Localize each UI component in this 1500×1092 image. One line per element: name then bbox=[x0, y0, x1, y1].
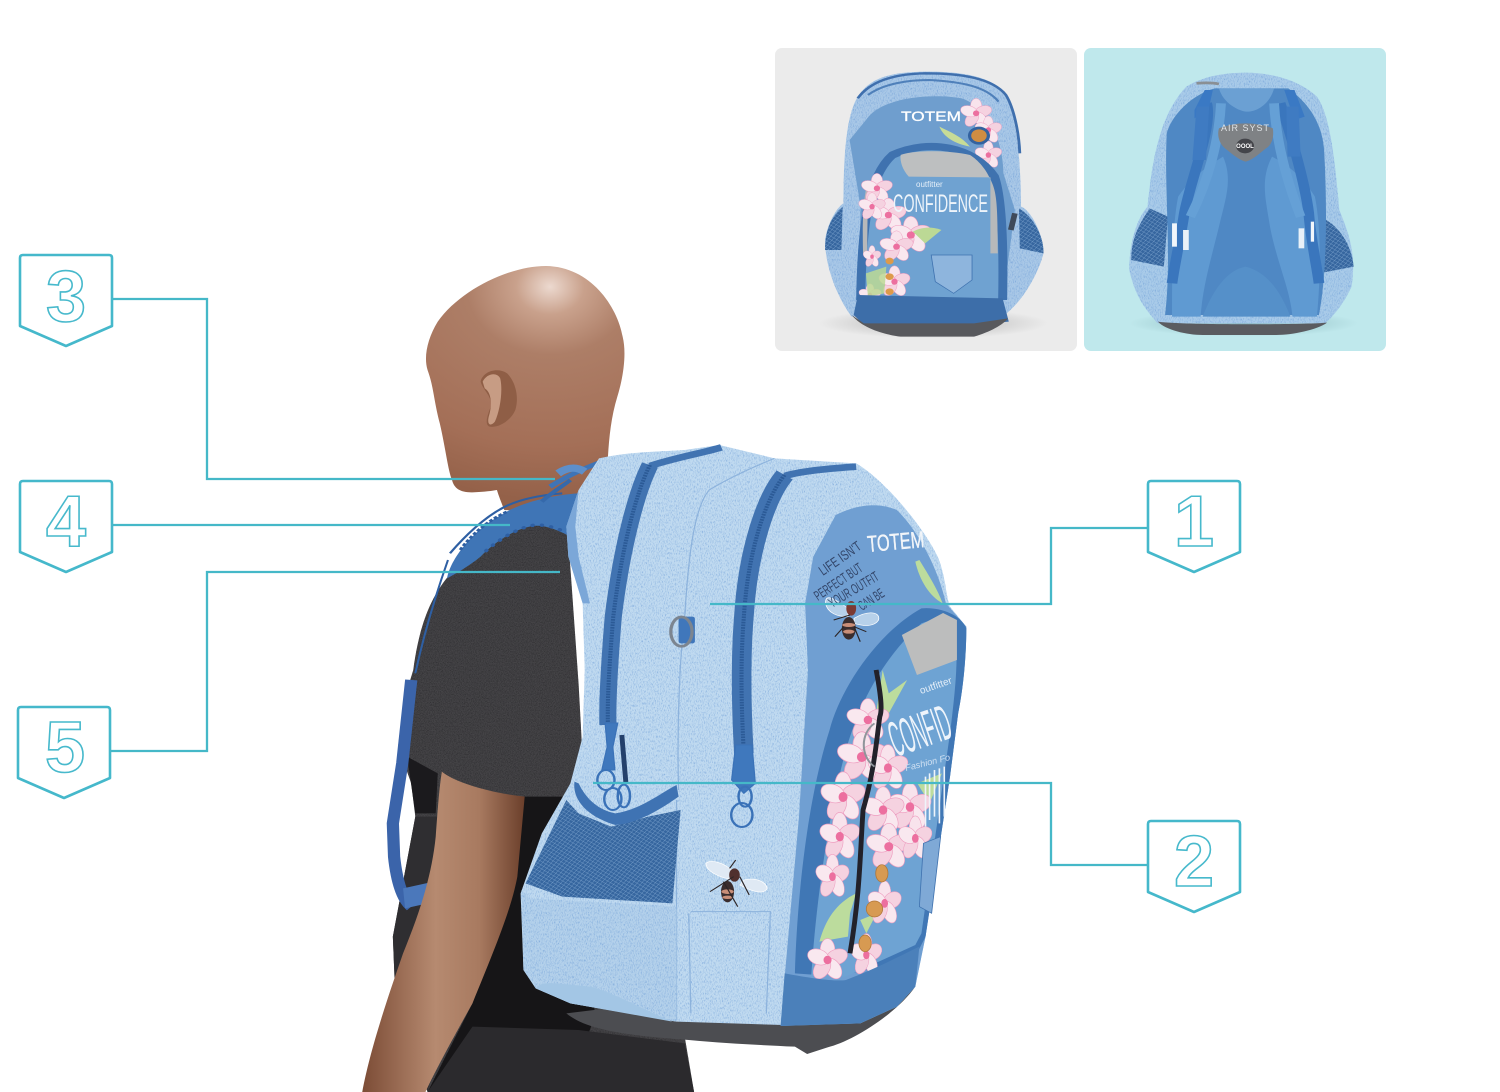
pocket zipper opening bbox=[850, 670, 881, 953]
text: confidence print: CONFIDENCE bbox=[893, 190, 988, 218]
text: slogan print: LIFE ISN'T bbox=[816, 538, 864, 578]
text: front view logo: TOTEM bbox=[901, 108, 961, 124]
bee front bbox=[826, 598, 879, 642]
text: slogan print: YOUR OUTFIT bbox=[825, 568, 882, 611]
badge 1: 1 bbox=[1174, 482, 1214, 562]
leader line 5 bbox=[110, 572, 560, 751]
text: air system badge: AIR SYST bbox=[1221, 123, 1270, 133]
bee side bbox=[706, 860, 767, 907]
neck padding bbox=[447, 493, 578, 578]
zipper left bbox=[608, 447, 721, 725]
shadow under sleeve bbox=[407, 757, 438, 813]
leader line 4 bbox=[112, 524, 510, 526]
shoulder strap bbox=[393, 680, 434, 908]
padding scallop bbox=[481, 525, 568, 556]
lower shirt folds bbox=[428, 1027, 694, 1092]
front panel bbox=[781, 505, 966, 1026]
front pocket print bbox=[811, 620, 957, 977]
back padded edge bbox=[566, 490, 590, 603]
buttons bbox=[859, 865, 888, 952]
torso shirt bbox=[393, 510, 694, 1092]
text: slogan print: PERFECT BUT bbox=[811, 559, 865, 603]
zipper right bbox=[742, 467, 856, 753]
bottom band bbox=[781, 947, 919, 1026]
text: outfitter print: outfitter bbox=[916, 180, 943, 189]
leader line 2 bbox=[593, 783, 1148, 865]
seams bbox=[677, 458, 774, 1020]
front pocket binding bbox=[795, 608, 966, 977]
badge 4 bbox=[20, 481, 112, 572]
zipper pull right bbox=[731, 745, 755, 827]
backpack body denim bbox=[521, 445, 966, 1025]
side pocket lower denim bbox=[521, 890, 677, 1022]
shadow right of arm bbox=[428, 797, 595, 1092]
zipper pulls left bbox=[597, 723, 630, 810]
badge 2: 2 bbox=[1174, 822, 1214, 902]
text: cool badge: OOOL bbox=[1236, 144, 1254, 150]
pocket grey lining bbox=[902, 613, 957, 675]
side pocket binding bbox=[574, 782, 679, 825]
text: fashion print: Fashion Fo bbox=[904, 752, 951, 773]
shadow left of arm bbox=[393, 817, 448, 1092]
neck laces bbox=[415, 460, 607, 673]
badge 2 bbox=[1148, 821, 1240, 912]
arm bbox=[362, 772, 525, 1092]
text: TOTEM logo: TOTEM bbox=[866, 526, 925, 557]
panel: backpack front view bbox=[775, 48, 1077, 351]
leader line 1 bbox=[710, 528, 1148, 604]
badge 5: 5 bbox=[45, 708, 85, 788]
figure: mannequin wearing backpack bbox=[362, 266, 966, 1092]
barcode stripes bbox=[926, 767, 944, 827]
d-ring bbox=[671, 617, 695, 646]
side pocket mesh bbox=[526, 800, 681, 903]
leaves bbox=[819, 560, 943, 942]
text: outfitter: outfitter bbox=[918, 675, 954, 697]
badge 3 bbox=[20, 255, 112, 346]
leader line 3 bbox=[112, 299, 555, 479]
badge 4: 4 bbox=[46, 482, 86, 562]
head and neck bbox=[426, 266, 624, 513]
badge 1 bbox=[1148, 481, 1240, 572]
badge 5 bbox=[18, 707, 110, 798]
text: slogan print: CAN BE bbox=[855, 585, 887, 614]
badge 3: 3 bbox=[46, 257, 86, 337]
text: CONFID bbox=[881, 694, 958, 767]
backpack base bbox=[566, 987, 915, 1054]
panel: backpack back view bbox=[1084, 48, 1386, 351]
jeans pocket print bbox=[919, 837, 941, 913]
ear bbox=[481, 370, 517, 427]
flowers bbox=[806, 699, 934, 982]
